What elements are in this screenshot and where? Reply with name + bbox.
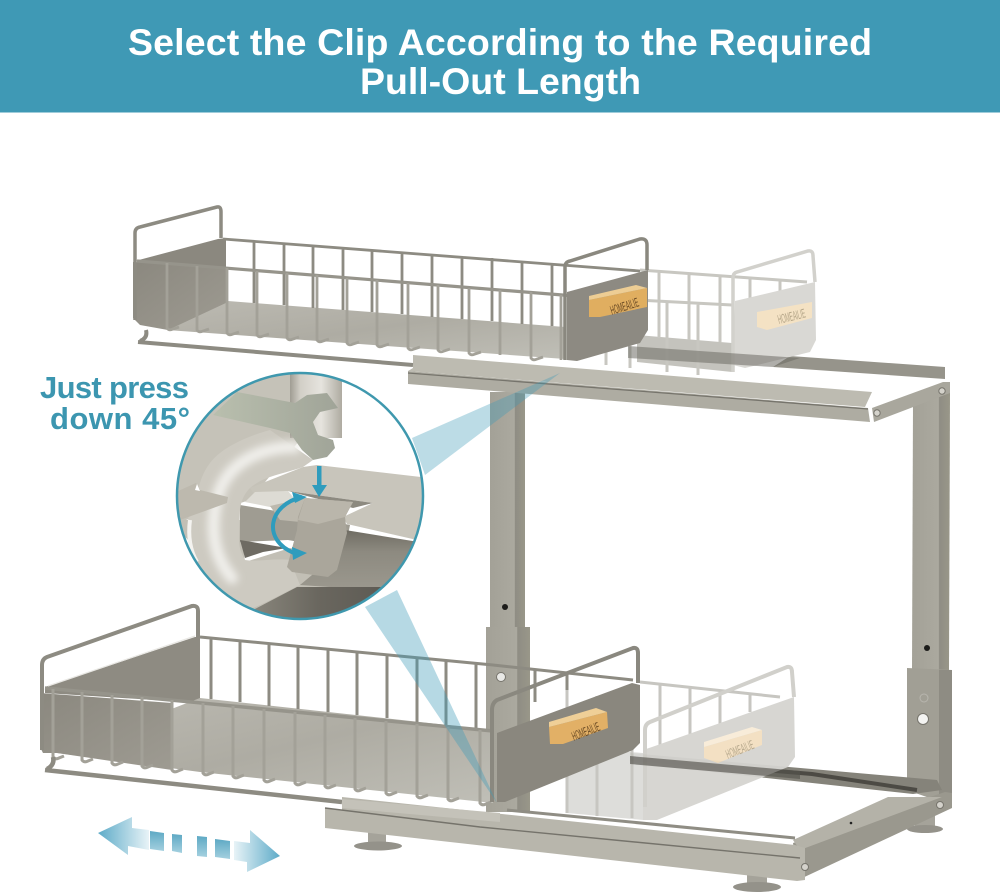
clip tab bbox=[287, 498, 353, 577]
upper front bars bbox=[167, 263, 561, 360]
icon: double-headed pull-out arrow bbox=[98, 817, 280, 872]
lower left handle bbox=[42, 606, 198, 750]
dark lower channel bbox=[255, 587, 381, 618]
translucent clip top bbox=[270, 498, 316, 522]
lower front rail bbox=[45, 688, 493, 731]
lower logo block: HOMEAILIE bbox=[570, 719, 602, 744]
upper left handle bbox=[135, 207, 221, 320]
magnified clip detail bbox=[170, 370, 430, 625]
caption: just press down 45 degrees: down 45° bbox=[50, 401, 190, 436]
lower front bars bbox=[53, 689, 491, 805]
ghost rail shadow bbox=[628, 346, 800, 367]
shelf tab bbox=[176, 483, 228, 520]
ghost upper sliding basket bbox=[600, 251, 816, 375]
header banner bbox=[0, 0, 1000, 112]
top rear rail bbox=[773, 356, 945, 379]
upper back rail and bars bbox=[223, 239, 640, 326]
magnifier beam: lower bbox=[365, 590, 497, 803]
interior under plate bbox=[240, 505, 350, 542]
magnifier beam: upper bbox=[412, 373, 560, 475]
looped wire tube bbox=[187, 430, 313, 608]
lower tube body bbox=[181, 520, 329, 609]
lower basket floor bbox=[57, 698, 493, 803]
center support column bbox=[486, 392, 530, 812]
ghost logo block bbox=[704, 727, 762, 763]
title: Select the Clip According to the Required bbox=[128, 21, 872, 63]
bottom rail strip over ghost bbox=[630, 756, 800, 779]
ghost upper sliding basket: HOMEAILIE bbox=[776, 306, 807, 327]
lens ring bbox=[177, 373, 423, 619]
right channel bbox=[300, 530, 414, 587]
upper sliding side panel bbox=[565, 239, 648, 361]
horizontal plate bbox=[256, 465, 422, 540]
upper front rail bbox=[137, 261, 600, 298]
caption: just press down 45 degrees: Just press bbox=[40, 370, 189, 405]
lower pull rod bbox=[45, 757, 342, 802]
wrench bbox=[213, 392, 338, 460]
lower slide plate bbox=[342, 799, 500, 822]
lower back panel bbox=[45, 637, 200, 703]
lower basket bbox=[40, 606, 633, 822]
upper basket bbox=[133, 207, 640, 365]
back panel bbox=[178, 374, 298, 520]
lower back rail and bars bbox=[200, 637, 633, 728]
upper logo block: HOMEAILIE bbox=[608, 295, 641, 318]
bright plate lip bbox=[245, 491, 298, 507]
upper pull rod bbox=[138, 330, 413, 365]
bottom rear slide rail bbox=[630, 753, 942, 794]
rotation arrow bbox=[273, 492, 307, 560]
upper basket floor bbox=[167, 301, 565, 359]
right support column bbox=[907, 392, 952, 806]
lower sliding side panel bbox=[492, 648, 640, 802]
title: Pull-Out Length bbox=[360, 60, 641, 102]
ghost logo block: HOMEAILIE bbox=[724, 737, 756, 762]
clip slot bbox=[288, 491, 373, 508]
top frame bbox=[408, 355, 950, 422]
vertical tube bbox=[290, 370, 342, 438]
press-down arrow bbox=[312, 466, 327, 497]
bottom base frame bbox=[325, 792, 952, 881]
lower logo block bbox=[549, 708, 608, 744]
feet bbox=[354, 812, 943, 892]
upper back panel bbox=[135, 238, 226, 268]
rack: adjustable two-tier pull-out organizer bbox=[40, 207, 952, 892]
ghost lower sliding basket bbox=[567, 667, 795, 820]
ghost logo block bbox=[757, 302, 812, 330]
